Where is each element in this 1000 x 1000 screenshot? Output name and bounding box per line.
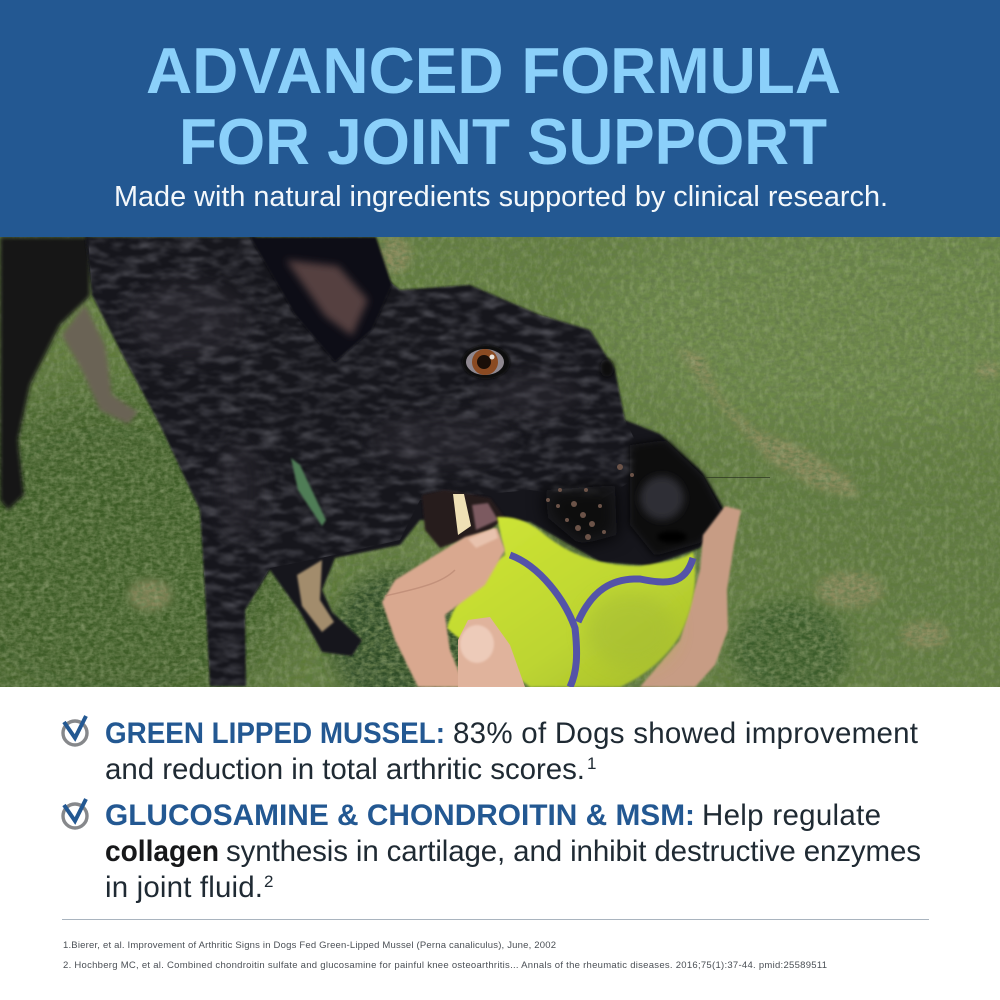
text: mussel claim: and reduction in total arthritic scores. — [105, 753, 585, 786]
nose and muzzle — [545, 440, 724, 556]
eye — [462, 345, 510, 379]
benefit: green lipped mussel — [63, 716, 918, 786]
footnotes: 1.Bierer, et al. Improvement of Arthritic Signs in Dogs Fed Green-Lipped Mussel (Perna canaliculus), June, 2002 — [63, 940, 556, 951]
text: glucosamine claim — [105, 799, 921, 904]
tennis ball — [447, 517, 695, 687]
dirt patches — [128, 237, 1000, 649]
tan paw marking — [297, 560, 334, 632]
header banner — [0, 0, 1000, 237]
text: mussel claim: 83% of Dogs showed improvement — [453, 717, 918, 750]
photo: dog with tennis ball — [0, 237, 1000, 687]
footnotes — [63, 940, 827, 971]
text: glucosamine claim: collagen — [105, 835, 219, 868]
title: ADVANCED FORMULA — [146, 34, 841, 107]
title — [146, 34, 841, 178]
text: mussel claim: 1 — [587, 754, 596, 773]
green collar — [291, 458, 326, 526]
subtitle: Made with natural ingredients supported by clinical research. — [114, 181, 888, 213]
grass background — [0, 237, 1000, 687]
icon: check 1 — [63, 716, 87, 745]
far eye — [600, 359, 614, 377]
title: FOR JOINT SUPPORT — [179, 105, 827, 178]
rear leg of second dog — [0, 237, 138, 510]
body fur highlight — [140, 286, 570, 526]
ball seam — [510, 555, 693, 687]
icon: check 2 — [63, 799, 87, 828]
text: mussel claim: GREEN LIPPED MUSSEL: — [105, 717, 445, 750]
text: glucosamine claim: synthesis in cartilage, and inhibit destructive enzymes — [226, 835, 921, 868]
text: glucosamine claim: Help regulate — [702, 799, 881, 832]
text: glucosamine claim: in joint fluid. — [105, 871, 263, 904]
ear — [250, 237, 392, 362]
footnotes: 2. Hochberg MC, et al. Combined chondroitin sulfate and glucosamine for painful knee osteoarthritis... Annals of the rheumatic diseases. 2016;75(1):37-44. pmid:25589511 — [63, 960, 827, 971]
right hand behind ball — [640, 506, 741, 687]
text: mussel claim — [105, 717, 918, 786]
left hand fingers — [382, 528, 525, 687]
benefit: glucosamine — [63, 799, 921, 904]
text: glucosamine claim: GLUCOSAMINE & CHONDROITIN & MSM: — [105, 799, 695, 832]
whisker line — [706, 477, 770, 478]
body fur texture — [88, 237, 650, 686]
dog body — [85, 237, 727, 686]
text: glucosamine claim: 2 — [264, 872, 273, 891]
mouth and teeth — [422, 490, 505, 548]
